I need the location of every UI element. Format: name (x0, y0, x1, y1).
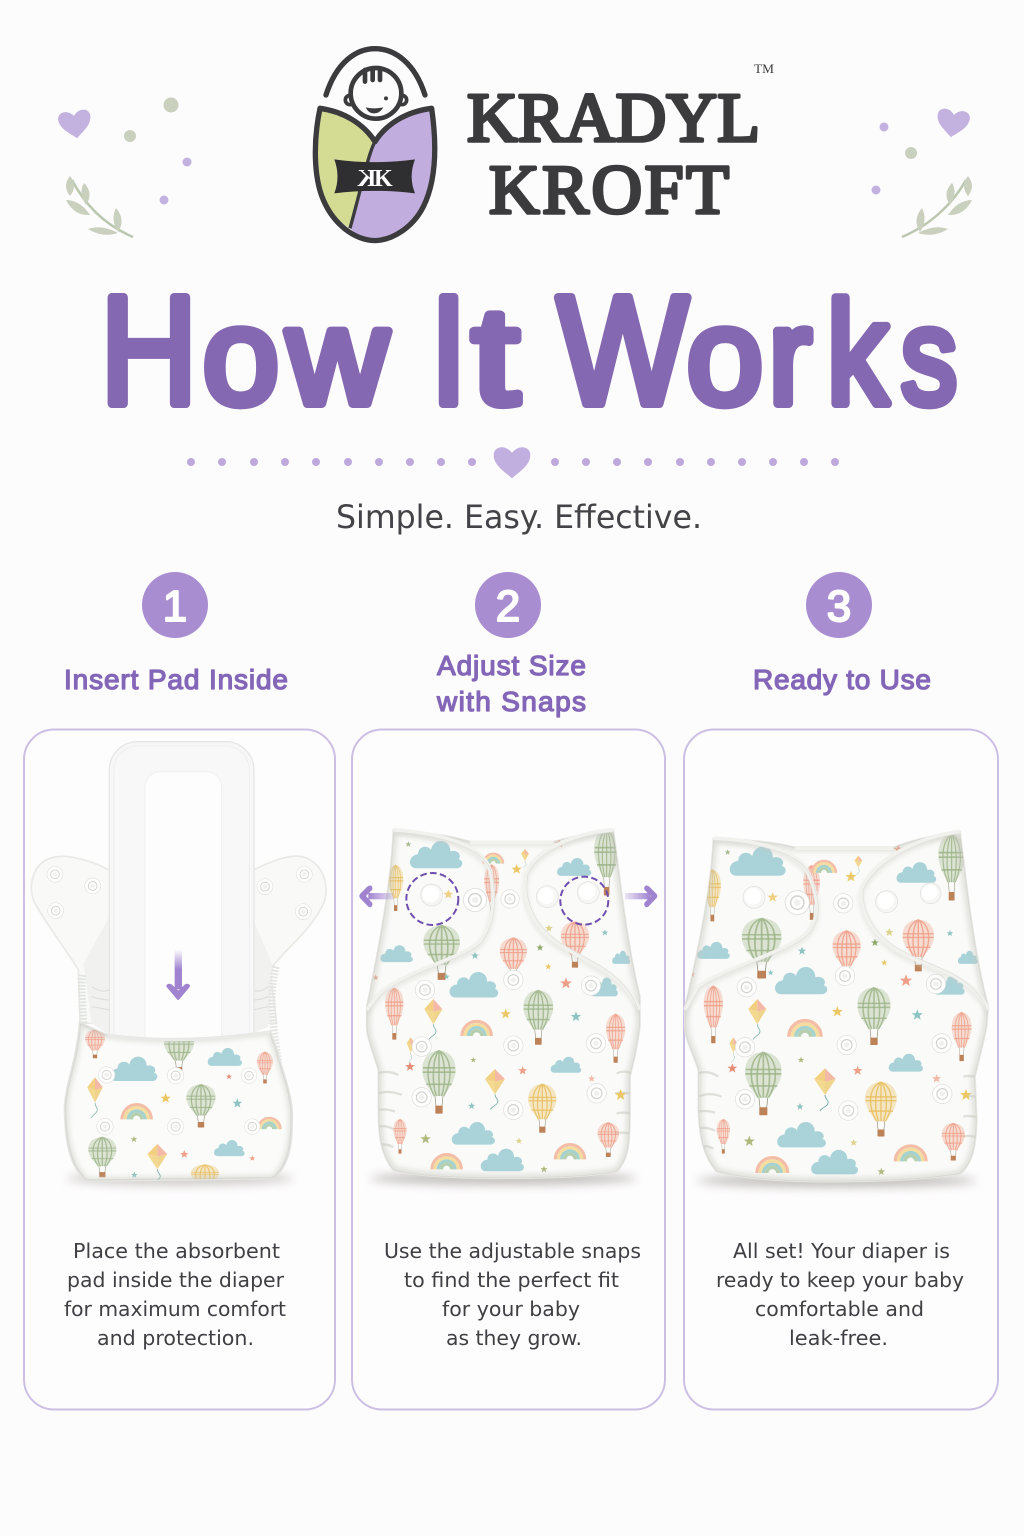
step 2 description: for your baby (442, 1297, 580, 1321)
title: H (100, 264, 197, 436)
decoration: top left hearts, dots and sprig (57, 98, 192, 237)
arrow: down into diaper (166, 949, 190, 1000)
title: I (431, 264, 467, 436)
step 3 description: leak-free. (789, 1326, 888, 1350)
step 3 description: All set! Your diaper is (733, 1239, 950, 1263)
step 2 badge and heading: with Snaps (436, 686, 586, 717)
logo: Kradyl Kroft (315, 49, 774, 241)
highlight: dashed circles on snaps (406, 873, 608, 925)
decoration: top right hearts, dots and sprig (872, 108, 972, 237)
logo emblem: swaddled baby (315, 49, 435, 241)
diaper tab edges (685, 832, 988, 1010)
panel: step 2 adjust size (352, 730, 665, 1410)
arrow: pull left (359, 885, 393, 907)
logo wordmark: KROFT (489, 152, 729, 229)
step 1 description: pad inside the diaper (67, 1268, 285, 1292)
diaper tab edges (367, 830, 640, 1010)
step 2 description: to find the perfect fit (404, 1268, 619, 1292)
step 2 description: Use the adjustable snaps (384, 1239, 641, 1263)
illustration: diaper with snaps highlighted (359, 830, 657, 1185)
step 3 badge and heading: Ready to Use (753, 664, 931, 695)
step 3 badge and heading (753, 572, 931, 695)
logo wordmark: KRADYL (467, 80, 760, 157)
wing snaps (47, 866, 312, 920)
title: s (901, 280, 957, 434)
title: o (687, 280, 763, 434)
step 3 description (716, 1239, 964, 1350)
title: t (472, 280, 519, 434)
panel: step 1 insert pad (24, 730, 335, 1410)
step 3 description: comfortable and (755, 1297, 924, 1321)
step 2 badge and heading: 2 (496, 582, 520, 631)
step 1 badge and heading: Insert Pad Inside (64, 664, 288, 695)
step 1 description: and protection. (97, 1326, 254, 1350)
logo wordmark (467, 61, 774, 229)
step 3 badge and heading: 3 (827, 582, 851, 631)
divider with heart (187, 447, 839, 478)
step 2 badge and heading: Adjust Size (437, 650, 586, 681)
title: w (286, 280, 389, 434)
step 1 description (64, 1239, 286, 1350)
step 3 description: ready to keep your baby (716, 1268, 964, 1292)
step 1 description: Place the absorbent (73, 1239, 280, 1263)
step 1 badge and heading (64, 572, 288, 695)
logo wordmark: TM (754, 61, 774, 76)
step 2 badge and heading (436, 572, 586, 717)
title: W (557, 264, 688, 436)
illustration: fastened diaper (685, 832, 988, 1187)
logo emblem: swaddled baby: K (357, 166, 376, 192)
title: k (827, 272, 889, 434)
title: r (769, 280, 812, 434)
panel: step 3 ready to use (684, 730, 998, 1410)
subtitle: Simple. Easy. Effective. (336, 498, 702, 536)
step 1 badge and heading: 1 (163, 582, 187, 631)
step 2 description: as they grow. (446, 1326, 582, 1350)
arrow: pull right (625, 885, 657, 907)
logo emblem: swaddled baby: K (374, 166, 393, 192)
absorbent pad (109, 742, 254, 1062)
illustration: diaper with absorbent pad (31, 742, 326, 1193)
step 2 description (384, 1239, 641, 1350)
step 1 description: for maximum comfort (64, 1297, 286, 1321)
diaper front panel (65, 1023, 292, 1193)
title: o (203, 280, 279, 434)
